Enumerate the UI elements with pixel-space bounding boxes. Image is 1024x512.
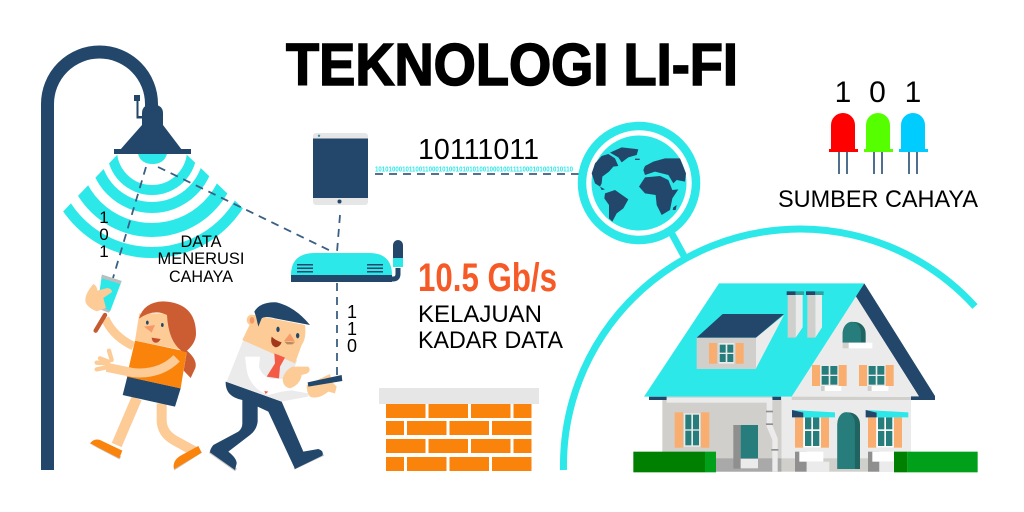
binary stream: 10101000101100110001010010101010010001001111000101001010110 bbox=[375, 164, 573, 174]
speed caption: KELAJUAN bbox=[418, 301, 542, 328]
label: 110: 0 bbox=[347, 336, 357, 356]
icon: router bbox=[291, 240, 403, 282]
figure: man with phone bbox=[209, 302, 342, 471]
hedges bbox=[633, 452, 978, 472]
binary label: 10111011 bbox=[418, 134, 539, 166]
label: 101 beside light bbox=[99, 208, 109, 261]
icon: LED indicators: 1 bbox=[835, 76, 851, 109]
label: 110: 1 bbox=[347, 319, 357, 339]
dashed data links bbox=[113, 167, 582, 377]
front door and steps bbox=[795, 412, 894, 472]
brick wall bbox=[379, 388, 539, 471]
coverage arc bbox=[563, 229, 975, 470]
icon: street lamp bbox=[48, 52, 191, 470]
main roof bbox=[644, 283, 864, 397]
light waves bbox=[63, 154, 243, 258]
speed caption bbox=[418, 301, 563, 354]
label: 101 beside light: 1 bbox=[99, 242, 109, 261]
chimneys bbox=[787, 291, 824, 338]
illustration: house bbox=[633, 283, 978, 472]
label: data menerusi cahaya: MENERUSI bbox=[158, 249, 244, 268]
icon: LED indicators: 1 bbox=[905, 76, 921, 109]
icon: LED indicators bbox=[829, 76, 928, 174]
label: data menerusi cahaya: CAHAYA bbox=[169, 267, 234, 286]
infographic canvas bbox=[41, 42, 978, 472]
icon: magnifier globe bbox=[582, 126, 696, 256]
title: TEKNOLOGI LI-FI bbox=[286, 31, 738, 98]
ground floor windows bbox=[792, 410, 908, 448]
label: 101 beside light: 1 bbox=[99, 208, 109, 227]
figure: woman with phone bbox=[85, 275, 202, 471]
house walls bbox=[649, 283, 935, 472]
speed value: 10.5 Gb/s bbox=[418, 256, 557, 300]
label: 110: 1 bbox=[347, 302, 357, 322]
icon: LED indicators: 0 bbox=[869, 76, 886, 109]
left annex details bbox=[667, 398, 778, 472]
icon: tablet bbox=[313, 133, 368, 205]
gable arch window bbox=[843, 322, 872, 348]
upper windows bbox=[812, 365, 894, 391]
label: data menerusi cahaya bbox=[158, 232, 244, 286]
LED caption: SUMBER CAHAYA bbox=[778, 186, 978, 213]
speed caption: KADAR DATA bbox=[418, 327, 563, 354]
label: 101 beside light: 0 bbox=[99, 225, 109, 244]
label: 110 bbox=[347, 302, 357, 356]
label: data menerusi cahaya: DATA bbox=[180, 232, 222, 251]
dormer bbox=[697, 314, 784, 369]
